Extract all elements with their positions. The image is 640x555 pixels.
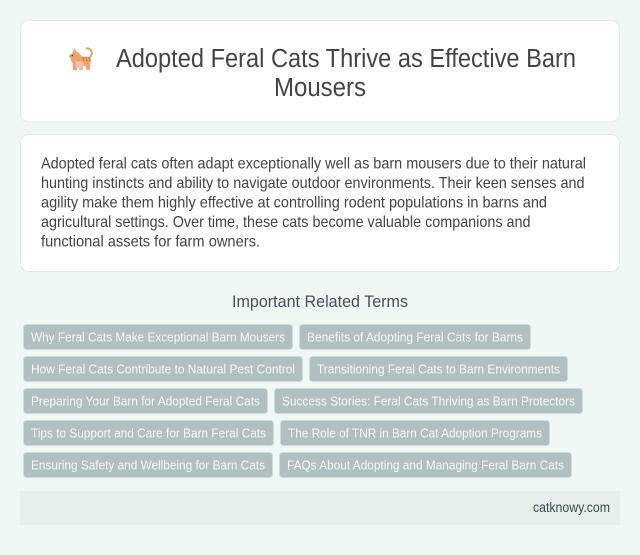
title line 2: Mousers: [274, 74, 366, 102]
footer: [20, 491, 620, 525]
heading: related terms: Important Related Terms: [232, 292, 408, 311]
tag: [24, 356, 302, 382]
icon: cat: [69, 47, 93, 70]
tag: FAQs About Adopting and Managing Feral Barn Cats: [287, 458, 564, 472]
text: line 4: agricultural settings. Over time, these cats become valuable companions and: [41, 214, 530, 231]
tag: [300, 324, 530, 350]
tag: Benefits of Adopting Feral Cats for Barns: [307, 330, 523, 344]
footer: site name: catknowy.com: [533, 500, 610, 515]
tag: [310, 356, 568, 382]
tag: [24, 324, 292, 350]
tag: [280, 420, 550, 446]
tag: Tips to Support and Care for Barn Feral Cats: [31, 426, 266, 440]
tag: How Feral Cats Contribute to Natural Pest Control: [31, 362, 295, 376]
tag list: [24, 324, 582, 478]
text: line 2: hunting instincts and ability to navigate outdoor environments. Their keen senses and: [41, 175, 584, 192]
tag: Transitioning Feral Cats to Barn Environments: [317, 362, 560, 376]
tag: The Role of TNR in Barn Cat Adoption Programs: [288, 426, 542, 440]
tag: [274, 388, 582, 414]
text: line 5: functional assets for farm owners.: [41, 234, 260, 250]
panel: title card: [20, 20, 620, 122]
tag: [280, 452, 572, 478]
panel: description card: [20, 134, 620, 272]
text: line 1: Adopted feral cats often adapt exceptionally well as barn mousers due to their natural: [41, 156, 586, 172]
tag: Why Feral Cats Make Exceptional Barn Mousers: [31, 330, 285, 344]
tag: [24, 452, 272, 478]
text: line 3: agility make them highly effective at controlling rodent populations in barns and: [41, 194, 547, 212]
tag: [24, 420, 274, 446]
tag: [24, 388, 268, 414]
tag: Preparing Your Barn for Adopted Feral Cats: [31, 394, 260, 408]
title line 1: Adopted Feral Cats Thrive as Effective Barn: [116, 45, 576, 73]
tag: Success Stories: Feral Cats Thriving as Barn Protectors: [282, 394, 575, 408]
tag: Ensuring Safety and Wellbeing for Barn Cats: [31, 458, 265, 472]
